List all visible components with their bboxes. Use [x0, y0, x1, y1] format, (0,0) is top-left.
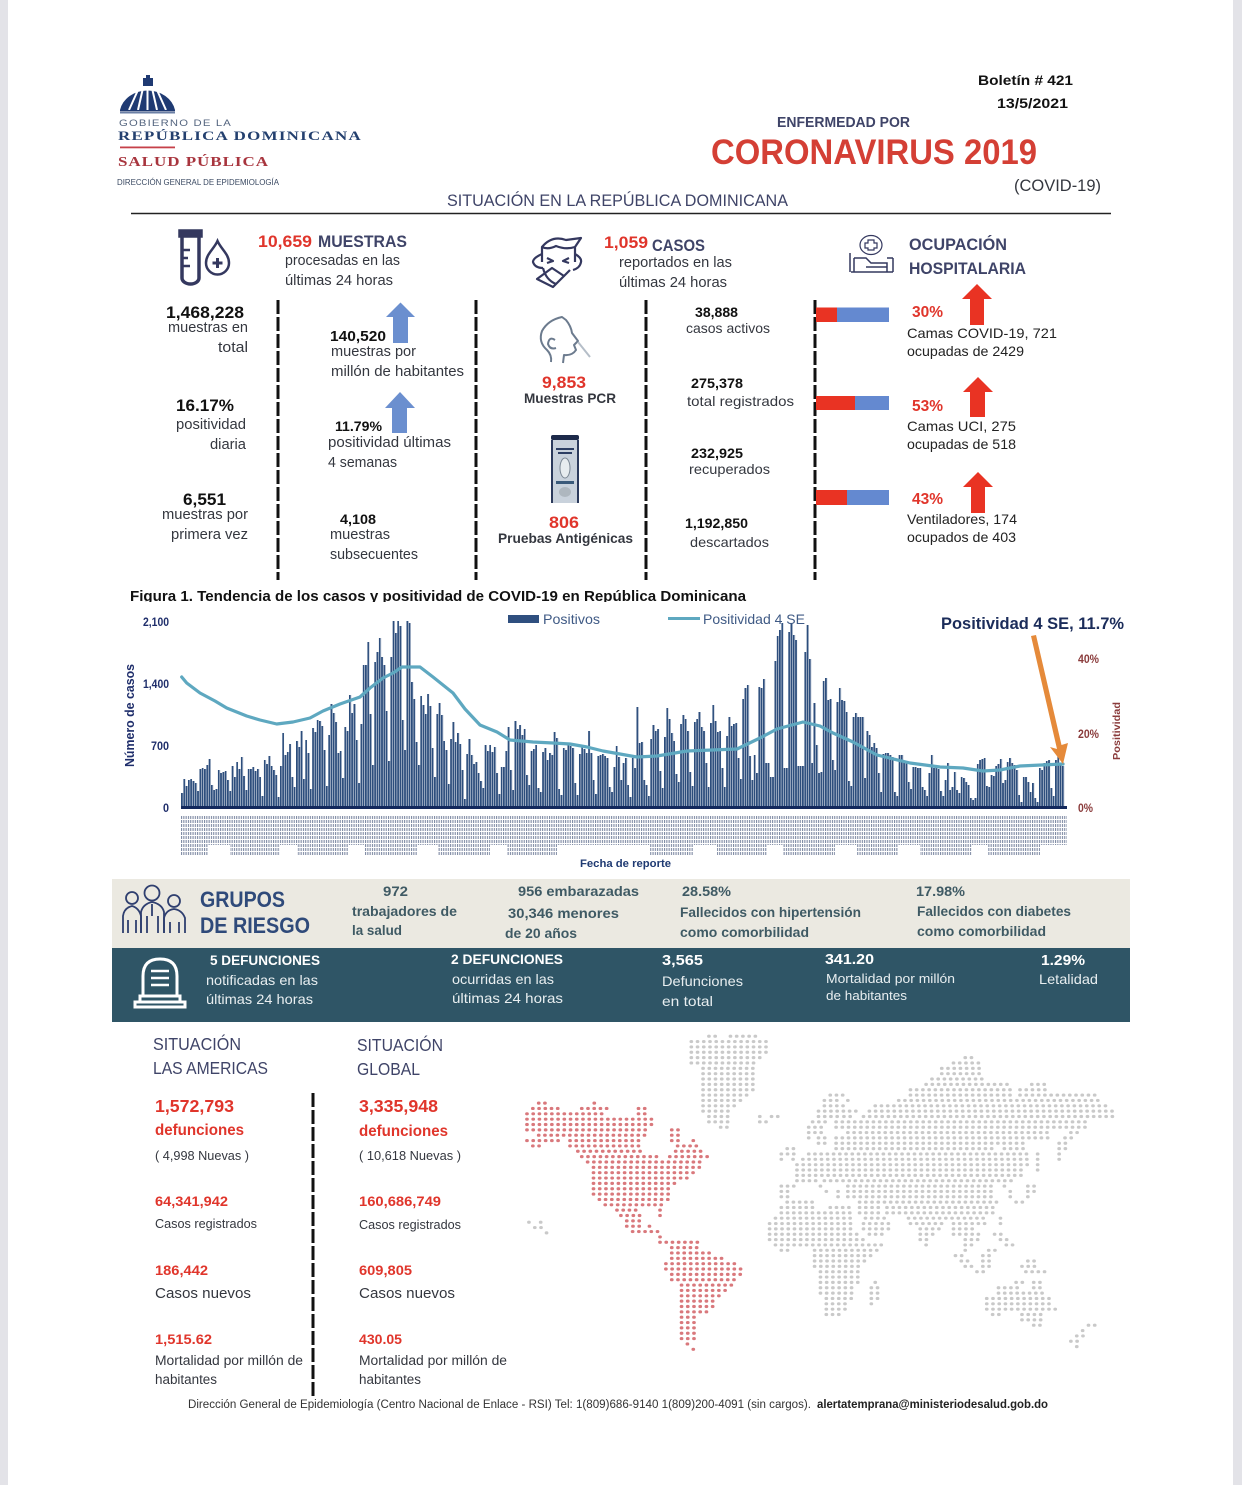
- stats: samples per million column: 4,108: [340, 511, 376, 527]
- casos heading: últimas 24 horas: [619, 275, 727, 291]
- chart: cases and positivity trend: [123, 611, 1124, 870]
- icon: three people: [123, 886, 185, 933]
- panel: situación global: SITUACIÓN: [357, 1034, 443, 1055]
- pcr samples: Muestras PCR: [524, 390, 616, 406]
- hospital occupancy: ventilators: [907, 491, 1017, 545]
- map: the americas: [527, 1103, 741, 1349]
- bar: icu beds occupancy: [816, 396, 889, 410]
- hospital occupancy: ventilators: Ventiladores, 174: [907, 511, 1017, 527]
- stats: samples total column: 6,551: [183, 490, 226, 509]
- stats: samples per million column: positividad últimas: [328, 435, 451, 451]
- icon: hospital bed: [850, 236, 893, 272]
- axis labels: cases: Número de casos: [123, 664, 137, 767]
- stat: health workers: 972: [383, 883, 408, 899]
- title: ENFERMEDAD POR: [777, 115, 911, 131]
- bulletin number and date: [978, 72, 1073, 111]
- stat: mortality per million: de habitantes: [826, 988, 908, 1003]
- stat: mortality per million: [825, 951, 955, 1003]
- ocupación hospitalaria heading: HOSPITALARIA: [909, 259, 1026, 278]
- logo: gobierno de la república dominicana: REPÚBLICA DOMINICANA: [118, 128, 362, 143]
- stat: lethality: Letalidad: [1039, 971, 1098, 987]
- icon: coughing face with mask: [533, 238, 581, 287]
- stats: samples per million column: subsecuentes: [330, 547, 418, 563]
- icon: tombstone: [135, 959, 185, 1007]
- heading: [200, 887, 310, 938]
- pcr samples: 9,853: [542, 373, 586, 392]
- casos heading: [604, 233, 732, 291]
- stat: pregnant and minors: 30,346 menores: [508, 905, 619, 921]
- panel: situación global: 3,335,948: [359, 1096, 438, 1116]
- icon: test tube and drop: [180, 230, 229, 284]
- annotation: positivity 11.7%: Positividad 4 SE, 11.7%: [941, 614, 1124, 633]
- logo: gobierno de la república dominicana: [117, 75, 362, 187]
- stats: cases column: 38,888: [695, 304, 738, 320]
- panel: situación global: [357, 1034, 507, 1387]
- stat: occurred deaths: últimas 24 horas: [452, 990, 563, 1006]
- stat: pregnant and minors: [505, 883, 639, 941]
- panel: situación las américas: Casos nuevos: [155, 1285, 251, 1302]
- dotted world map: [527, 1036, 1112, 1349]
- hospital occupancy: ventilators: 43%: [912, 491, 943, 508]
- footer: alertatemprana@ministeriodesalud.gob.do: [817, 1399, 1048, 1411]
- stat: occurred deaths: [451, 951, 563, 1006]
- bar: ventilators occupancy: [816, 490, 889, 505]
- bar: covid beds occupancy: [816, 308, 889, 322]
- figure title: Figura 1. Tendencia de los casos y positividad de COVID-19 en República Dominicana: [130, 589, 747, 605]
- stat: mortality per million: 341.20: [825, 951, 874, 968]
- stats: cases column: descartados: [690, 534, 769, 550]
- stat: pregnant and minors: de 20 años: [505, 925, 577, 941]
- axis labels: cases: 2,100: [143, 615, 169, 629]
- ocupación hospitalaria heading: [909, 235, 1026, 278]
- hospital occupancy: ventilators: ocupados de 403: [907, 529, 1016, 545]
- panel: situación global: Casos nuevos: [359, 1285, 455, 1302]
- icon: dome: [120, 75, 175, 114]
- muestras heading: últimas 24 horas: [285, 273, 393, 289]
- axis labels: positivity: 0%: [1078, 803, 1093, 815]
- stats: samples total column: muestras por: [162, 507, 248, 523]
- panel: situación global: habitantes: [359, 1372, 421, 1387]
- stat: health workers: [352, 883, 457, 938]
- panel: situación global: 160,686,749: [359, 1193, 441, 1209]
- stat: reported deaths: últimas 24 horas: [206, 991, 313, 1007]
- stat: reported deaths: notificadas en las: [206, 972, 318, 988]
- panel: situación global: Mortalidad por millón de: [359, 1353, 507, 1368]
- stat: mortality per million: Mortalidad por millón: [826, 971, 955, 986]
- stat: hypertension: como comorbilidad: [680, 924, 809, 940]
- stats: samples per million column: 11.79%: [335, 418, 383, 434]
- stats: samples total column: 1,468,228: [166, 303, 244, 322]
- panel: situación global: ( 10,618 Nuevas ): [359, 1148, 461, 1163]
- axis labels: cases: 1,400: [143, 677, 169, 691]
- antigen tests: [498, 513, 633, 546]
- panel: situación las américas: 1,515.62: [155, 1331, 212, 1347]
- panel: situación las américas: defunciones: [155, 1122, 244, 1139]
- hospital occupancy: icu beds: Camas UCI, 275: [907, 418, 1016, 434]
- stats: samples per million column: [328, 328, 464, 563]
- stat: diabetes: 17.98%: [916, 883, 966, 899]
- axis baseline: [181, 806, 1067, 809]
- date axis labels: [181, 815, 1067, 855]
- stats: samples per million column: 140,520: [330, 328, 386, 345]
- stats: samples total column: muestras en: [168, 320, 248, 336]
- antigen tests: Pruebas Antigénicas: [498, 530, 633, 546]
- stats: samples total column: positividad: [176, 417, 246, 433]
- arrow: annotation pointer: [1031, 635, 1068, 764]
- casos heading: reportados en las: [619, 255, 732, 271]
- axis labels: cases: 700: [151, 739, 169, 753]
- stats: samples per million column: muestras por: [331, 344, 416, 360]
- stat: total deaths: en total: [662, 993, 713, 1009]
- stat: health workers: trabajadores de: [352, 903, 457, 919]
- stats: cases column: casos activos: [686, 320, 770, 336]
- muestras heading: [258, 232, 407, 289]
- panel: situación las américas: [153, 1033, 303, 1387]
- hospital occupancy: icu beds: [907, 398, 1016, 452]
- hospital occupancy: icu beds: ocupadas de 518: [907, 436, 1016, 452]
- icon: nasal swab: [541, 317, 590, 363]
- stat: hypertension: [680, 883, 861, 940]
- stats: samples total column: [162, 303, 248, 543]
- stats: samples per million column: 4 semanas: [328, 455, 397, 471]
- panel: situación las américas: Mortalidad por millón de: [155, 1353, 303, 1368]
- subtitle: situación en la república dominicana: SITUACIÓN EN LA REPÚBLICA DOMINICANA: [447, 191, 788, 210]
- stats: cases column: 1,192,850: [685, 515, 748, 531]
- panel: situación global: 609,805: [359, 1262, 412, 1278]
- stats: cases column: [685, 304, 794, 550]
- heading: DE RIESGO: [200, 913, 310, 938]
- casos heading: CASOS: [652, 236, 705, 255]
- stat: total deaths: [662, 952, 743, 1009]
- stats: cases column: total registrados: [687, 393, 794, 409]
- panel: situación global: GLOBAL: [357, 1059, 420, 1079]
- panel: situación las américas: Casos registrados: [155, 1216, 257, 1231]
- antigen tests: 806: [549, 513, 579, 532]
- stats: samples total column: diaria: [210, 437, 247, 453]
- axis labels: cases: 0: [163, 801, 169, 815]
- bars: daily positives: [181, 621, 1064, 806]
- bulletin number and date: 13/5/2021: [997, 95, 1068, 111]
- axis labels: positivity: [1078, 654, 1123, 815]
- stat: diabetes: Fallecidos con diabetes: [917, 903, 1071, 919]
- heading: GRUPOS: [200, 887, 285, 912]
- panel: situación las américas: habitantes: [155, 1372, 217, 1387]
- stat: occurred deaths: 2 DEFUNCIONES: [451, 951, 563, 967]
- stats: samples per million column: muestras: [330, 527, 390, 543]
- axis labels: cases: [123, 615, 169, 815]
- legend: [508, 611, 805, 627]
- arrow: icu beds up: [963, 377, 993, 417]
- legend: Positivos: [543, 611, 600, 627]
- hospital occupancy: covid beds: Camas COVID-19, 721: [907, 325, 1057, 341]
- casos heading: 1,059: [604, 233, 648, 252]
- title: (COVID-19): [1014, 177, 1101, 195]
- hospital occupancy: covid beds: 30%: [912, 304, 943, 321]
- stat: health workers: la salud: [352, 922, 402, 938]
- title: CORONAVIRUS 2019: [711, 133, 1037, 172]
- panel: situación las américas: LAS AMERICAS: [153, 1058, 268, 1078]
- map: rest of the world: [529, 1036, 1112, 1347]
- logo: gobierno de la república dominicana: GOBIERNO DE LA: [119, 118, 232, 129]
- stat: total deaths: Defunciones: [662, 973, 743, 989]
- stat: diabetes: como comorbilidad: [917, 923, 1046, 939]
- arrow: samples per million up: [386, 302, 415, 343]
- stat: lethality: 1.29%: [1041, 952, 1085, 969]
- stat: hypertension: 28.58%: [682, 883, 732, 899]
- stats: samples total column: total: [218, 340, 248, 356]
- stats: samples per million column: millón de habitantes: [331, 364, 464, 380]
- legend: Positividad 4 SE: [703, 611, 805, 627]
- stats: cases column: recuperados: [689, 461, 770, 477]
- hospital occupancy: covid beds: [907, 304, 1057, 359]
- x axis title: Fecha de reporte: [580, 858, 671, 870]
- stat: lethality: [1039, 952, 1098, 987]
- muestras heading: 10,659: [258, 232, 312, 251]
- panel: situación las américas: 186,442: [155, 1262, 208, 1278]
- axis labels: positivity: Positividad: [1111, 702, 1123, 760]
- muestras heading: MUESTRAS: [318, 232, 407, 251]
- panel: grupos de riesgo: [112, 879, 1130, 948]
- hospital occupancy: covid beds: ocupadas de 2429: [907, 343, 1024, 359]
- panel: situación global: Casos registrados: [359, 1217, 461, 1232]
- logo: gobierno de la república dominicana: SALUD PÚBLICA: [118, 153, 269, 170]
- panel: situación las américas: ( 4,998 Nuevas ): [155, 1148, 249, 1163]
- stat: occurred deaths: ocurridas en las: [452, 971, 554, 987]
- logo: gobierno de la república dominicana: DIRECCIÓN GENERAL DE EPIDEMIOLOGÍA: [117, 177, 280, 187]
- ocupación hospitalaria heading: OCUPACIÓN: [909, 235, 1007, 254]
- bulletin number and date: Boletín # 421: [978, 72, 1073, 88]
- stat: reported deaths: [206, 952, 320, 1007]
- panel: situación las américas: 1,572,793: [155, 1096, 234, 1116]
- axis labels: positivity: 40%: [1078, 654, 1099, 666]
- stats: cases column: 275,378: [691, 375, 743, 391]
- arrow: ventilators up: [963, 472, 993, 513]
- panel: situación las américas: SITUACIÓN: [153, 1033, 241, 1054]
- footer: Dirección General de Epidemiología (Centro Nacional de Enlace - RSI) Tel: 1(809)686-9140 1(809)200-4091 (sin cargos).: [188, 1399, 811, 1411]
- panel: defunciones: [112, 948, 1130, 1022]
- stats: samples total column: 16.17%: [176, 396, 234, 415]
- positivity line: [182, 667, 1063, 771]
- stat: total deaths: 3,565: [662, 952, 703, 969]
- hospital occupancy: icu beds: 53%: [912, 398, 943, 415]
- stats: samples total column: primera vez: [171, 527, 248, 543]
- title: [711, 115, 1101, 195]
- stat: pregnant and minors: 956 embarazadas: [518, 883, 639, 899]
- panel: situación global: 430.05: [359, 1331, 402, 1347]
- arrow: positivity up: [385, 392, 415, 433]
- muestras heading: procesadas en las: [285, 253, 400, 269]
- panel: situación las américas: 64,341,942: [155, 1193, 228, 1209]
- panel: situación global: defunciones: [359, 1123, 448, 1140]
- stat: diabetes: [916, 883, 1071, 939]
- axis labels: positivity: 20%: [1078, 729, 1099, 741]
- stat: hypertension: Fallecidos con hipertensión: [680, 904, 861, 920]
- pcr samples: [524, 373, 616, 406]
- icon: antigen test cassette: [551, 435, 579, 503]
- stats: cases column: 232,925: [691, 445, 743, 461]
- stat: reported deaths: 5 DEFUNCIONES: [210, 952, 320, 968]
- arrow: covid beds up: [962, 284, 992, 325]
